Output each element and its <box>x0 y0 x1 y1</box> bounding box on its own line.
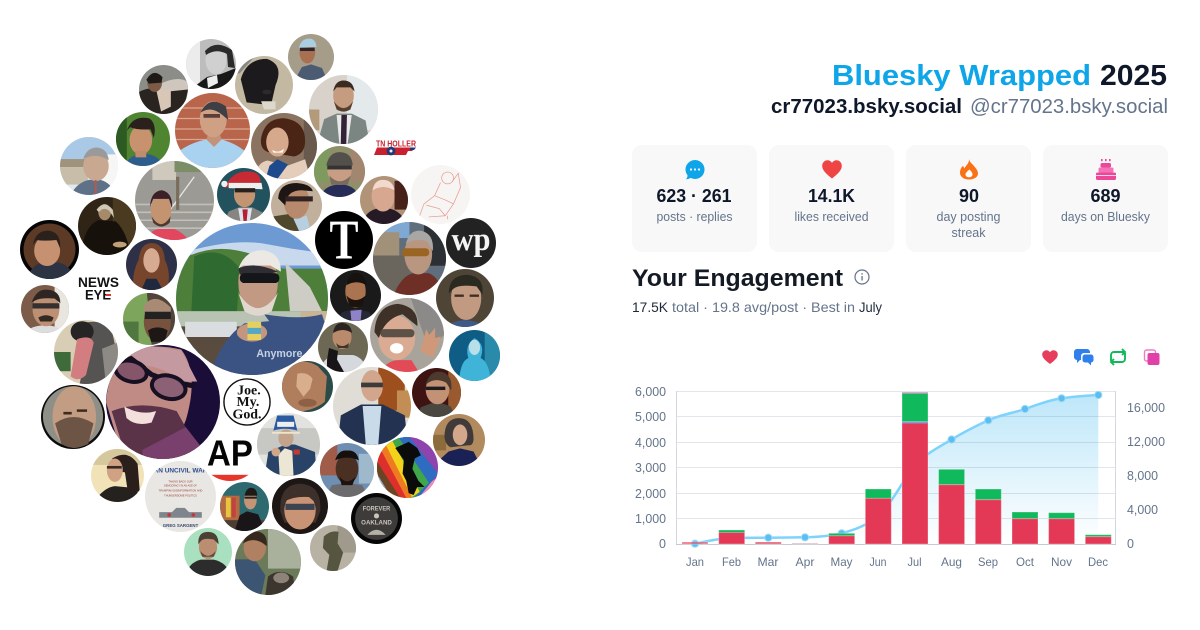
month labels: Jul <box>908 555 922 569</box>
left axis labels <box>635 385 666 551</box>
avatar: man with dark hair close up <box>436 269 494 327</box>
icon: heart <box>822 160 842 178</box>
avatar: man with glasses dark background <box>272 478 328 534</box>
avatar: book An Uncivil War <box>145 461 216 532</box>
cumulative line <box>695 395 1098 544</box>
avatar: blue hoodie figure <box>449 330 500 381</box>
stat card: posts and replies: 623 · 261 <box>656 186 732 206</box>
avatar: Associated Press <box>208 440 252 481</box>
avatar: muscular torso <box>282 361 333 412</box>
avatar: pride silhouette <box>377 437 438 498</box>
avatar: book An Uncivil War: GREG SARGENT <box>163 523 199 528</box>
stat card: likes: likes received <box>794 209 868 224</box>
avatar: Washington Post: wp <box>452 222 490 258</box>
avatar: Joe My God: God. <box>233 407 261 422</box>
user handle: cr77023.bsky.social <box>771 96 962 118</box>
avatar: Joe My God <box>223 378 271 426</box>
avatar: Joe My God: Joe. <box>237 383 261 398</box>
month labels: Aug <box>941 555 962 569</box>
month labels: Jun <box>870 555 886 569</box>
left axis labels: 4,000 <box>635 436 666 450</box>
month labels: Jan <box>686 555 704 569</box>
month labels <box>686 555 1108 569</box>
month labels: Nov <box>1051 555 1072 569</box>
right axis labels: 8,000 <box>1127 469 1158 483</box>
avatar: book An Uncivil War: THUNDERDOME POLITICS <box>164 493 197 497</box>
avatar: bearded man in suit <box>330 270 381 321</box>
avatar: dog with tongue out <box>54 320 118 384</box>
avatar: book An Uncivil War: DEMOCRACY IN AN AGE OF <box>164 484 197 488</box>
left axis labels: 6,000 <box>635 385 666 399</box>
icon: replies bubbles <box>1074 349 1094 366</box>
avatar: man with orange sunglasses <box>373 222 446 295</box>
stacked bars <box>682 392 1111 544</box>
stat card: posts and replies <box>632 145 757 252</box>
month labels: Dec <box>1088 555 1108 569</box>
avatar: red line sketch <box>411 165 470 224</box>
user handle: @cr77023.bsky.social <box>970 96 1168 118</box>
engagement summary: July <box>859 299 882 315</box>
stat card: posts and replies: posts · replies <box>656 209 733 224</box>
avatar: Associated Press: AP <box>207 432 253 474</box>
title: Bluesky Wrapped <box>832 60 1091 92</box>
avatar: man with hat and sunglasses <box>288 34 334 80</box>
avatar: bald man with stubble <box>41 385 105 449</box>
avatar: man with round glasses <box>271 180 322 231</box>
icon: speech bubble <box>685 160 705 179</box>
engagement summary: 17.5K <box>632 299 669 315</box>
chart: monthly engagement bars and cumulative area <box>635 385 1165 569</box>
avatar: smiling man at beach <box>60 137 118 195</box>
avatar: black fluffy dog <box>235 56 293 114</box>
left axis labels: 1,000 <box>635 512 666 526</box>
icon: likes heart <box>1042 350 1058 364</box>
avatar: sepia statue <box>310 525 356 571</box>
avatar cloud <box>20 34 500 595</box>
avatar: Forever Oakland: FOREVER <box>363 505 391 512</box>
stat card: posting streak: day posting <box>936 209 1000 224</box>
chart legend <box>1042 349 1160 366</box>
gridlines and axes <box>676 391 1116 544</box>
right axis labels: 0 <box>1127 537 1134 551</box>
avatar: woman with dark bob <box>433 414 485 466</box>
logo: News Eye: EYE <box>85 286 111 302</box>
avatar: man with glasses and mustache <box>21 285 69 333</box>
engagement summary: total · 19.8 avg/post · Best in <box>672 299 855 315</box>
avatar: bearded man with glasses <box>314 146 365 197</box>
avatar: curly haired woman <box>251 113 317 179</box>
icon: flame <box>960 159 978 180</box>
left axis labels: 5,000 <box>635 410 666 424</box>
avatar: classical painting <box>78 197 136 255</box>
logo: TN Holler: TN HOLLER <box>376 138 416 148</box>
avatar: New York Times <box>315 211 373 269</box>
logo: News Eye <box>78 274 119 302</box>
avatar: New York Times: T <box>330 210 359 272</box>
avatar: book An Uncivil War: AN UNCIVIL WAR <box>154 467 208 474</box>
user handle <box>771 96 1168 118</box>
stat card: days on Bluesky: days on Bluesky <box>1061 209 1150 224</box>
icon: birthday cake <box>1096 159 1116 180</box>
right axis labels: 12,000 <box>1127 435 1165 449</box>
avatar: book An Uncivil War: TRUMPIAN DISINFORMATION AND <box>158 489 203 493</box>
logo: News Eye: NEWS <box>78 274 119 290</box>
stat card: likes <box>769 145 894 252</box>
title: 2025 <box>1100 60 1167 92</box>
stat card: days on Bluesky: 689 <box>1090 186 1120 206</box>
avatar: black man selfie <box>320 443 374 497</box>
right axis labels <box>1127 401 1165 551</box>
avatar: bald man in dark shirt <box>360 176 408 224</box>
avatar: man in santa hat <box>217 168 270 221</box>
stat card: posting streak: streak <box>952 225 986 240</box>
month labels: Oct <box>1016 555 1035 569</box>
avatar: man in grey suit <box>309 75 378 144</box>
avatar: main profile, man with white cap at marina <box>176 223 328 375</box>
avatar: reclining man <box>139 65 188 114</box>
avatar: Joe My God: My. <box>237 395 259 410</box>
avatar: man with dog outdoors <box>235 529 301 595</box>
avatar: man on stairs <box>135 161 214 240</box>
month labels: Sep <box>978 555 998 569</box>
heading: Your Engagement: Your Engagement <box>632 265 843 292</box>
avatar: bald man in navy suit <box>333 367 411 445</box>
avatar: Uncle Sam <box>257 413 320 476</box>
avatar: man in black with books <box>220 482 269 531</box>
right axis labels: 16,000 <box>1127 401 1165 415</box>
avatar: woman with dark hair <box>91 449 144 502</box>
avatar: man with green hedge <box>116 112 170 166</box>
avatar: black and white portrait <box>186 39 236 89</box>
month labels: May <box>830 555 852 569</box>
right axis labels: 4,000 <box>1127 503 1158 517</box>
line points <box>691 391 1102 547</box>
stat card: posting streak <box>906 145 1031 252</box>
avatar: Washington Post <box>446 218 496 268</box>
avatar: man with sunglasses and foliage <box>123 293 175 345</box>
avatar: Forever Oakland <box>351 493 402 544</box>
avatar: woman with long red hair <box>126 239 177 290</box>
avatar: man with black cat <box>318 322 368 372</box>
avatar: woman with glasses waving <box>370 298 444 372</box>
left axis labels: 2,000 <box>635 487 666 501</box>
avatar: man with brick wall <box>175 93 250 168</box>
stat card: likes: 14.1K <box>808 186 855 206</box>
icon: info <box>855 270 869 284</box>
month labels: Apr <box>796 555 814 569</box>
month labels: Feb <box>722 555 741 569</box>
month labels: Mar <box>758 555 778 569</box>
avatar: Forever Oakland: OAKLAND <box>361 520 392 527</box>
avatar: man on mint background <box>184 528 232 576</box>
avatar: man with glasses in dark room <box>412 368 461 417</box>
icon: quote squares <box>1144 350 1160 365</box>
icon: repost arrows <box>1111 349 1125 365</box>
avatar: purple toned man with glasses <box>106 345 220 459</box>
avatar: main profile, man with white cap at marina: Anymore <box>256 348 302 360</box>
avatar: man with black ring <box>20 220 79 279</box>
left axis labels: 0 <box>659 537 666 551</box>
stat card: days on Bluesky <box>1043 145 1168 252</box>
logo: TN Holler <box>374 138 416 155</box>
cumulative area <box>695 395 1098 544</box>
left axis labels: 3,000 <box>635 461 666 475</box>
stat card: posting streak: 90 <box>959 186 979 206</box>
avatar: book An Uncivil War: TAKING BACK OUR <box>168 479 193 483</box>
